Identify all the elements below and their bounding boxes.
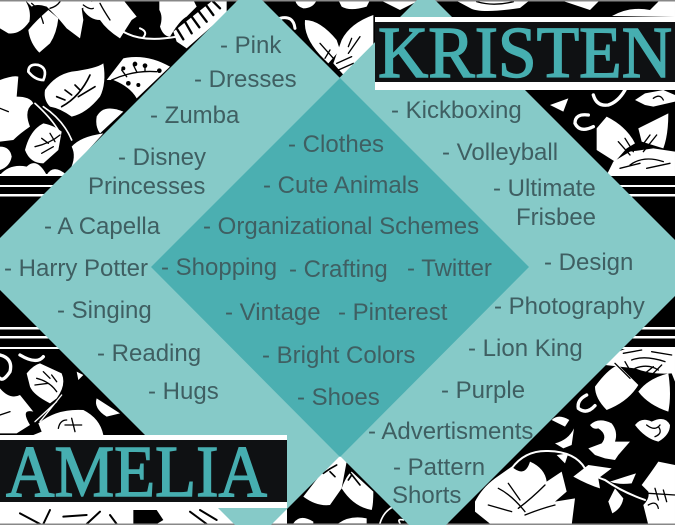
- Amelia list: Princesses: [88, 173, 205, 200]
- Kristen list: Shorts: [392, 482, 461, 509]
- Amelia list: - Zumba: [150, 102, 240, 129]
- shared list: - Crafting: [289, 256, 388, 283]
- shared list: - Pinterest: [338, 299, 448, 326]
- bottom middle: [293, 455, 403, 523]
- Kristen list: Frisbee: [516, 204, 596, 231]
- strip below Amelia: [0, 508, 287, 524]
- centre overlap diamond: [151, 78, 529, 457]
- top middle: [280, 0, 373, 77]
- Amelia list: - Disney: [118, 144, 206, 171]
- top strip above Kristen: [380, 0, 675, 17]
- Amelia list: [4, 32, 297, 405]
- shared list: - Shopping: [161, 254, 277, 281]
- Amelia list: - Pink: [220, 32, 282, 59]
- Kristen list: - Ultimate: [493, 175, 596, 202]
- shared list: - Vintage: [225, 299, 321, 326]
- Amelia list: - Singing: [57, 297, 152, 324]
- Kristen list: - Kickboxing: [391, 97, 522, 124]
- shared list: - Cute Animals: [263, 172, 419, 199]
- shared list: - Organizational Schemes: [203, 213, 479, 240]
- left diamond: Amelia: [0, 0, 529, 525]
- Kristen list: - Advertisments: [368, 418, 533, 445]
- bottom left: [0, 355, 140, 442]
- Amelia list: - A Capella: [44, 213, 161, 240]
- Kristen list: - Lion King: [468, 335, 583, 362]
- Amelia list: - Reading: [97, 340, 201, 367]
- Kristen list: - Purple: [441, 377, 525, 404]
- shared list: - Bright Colors: [262, 342, 415, 369]
- Amelia banner: AMELIA: [6, 431, 267, 512]
- Amelia list: - Hugs: [148, 378, 219, 405]
- Kristen list: [368, 97, 645, 509]
- bottom right: [475, 345, 675, 525]
- shared list: [161, 131, 492, 411]
- Amelia list: - Dresses: [194, 66, 297, 93]
- right diamond: Kristen: [151, 0, 675, 525]
- shared list: - Twitter: [407, 255, 492, 282]
- Kristen list: - Photography: [494, 293, 645, 320]
- Kristen list: - Pattern: [393, 454, 485, 481]
- top right: [550, 90, 675, 175]
- shared list: - Shoes: [297, 384, 380, 411]
- Amelia list: - Harry Potter: [4, 255, 148, 282]
- shared list: - Clothes: [288, 131, 384, 158]
- Kristen list: - Design: [544, 249, 633, 276]
- Kristen list: - Volleyball: [442, 139, 558, 166]
